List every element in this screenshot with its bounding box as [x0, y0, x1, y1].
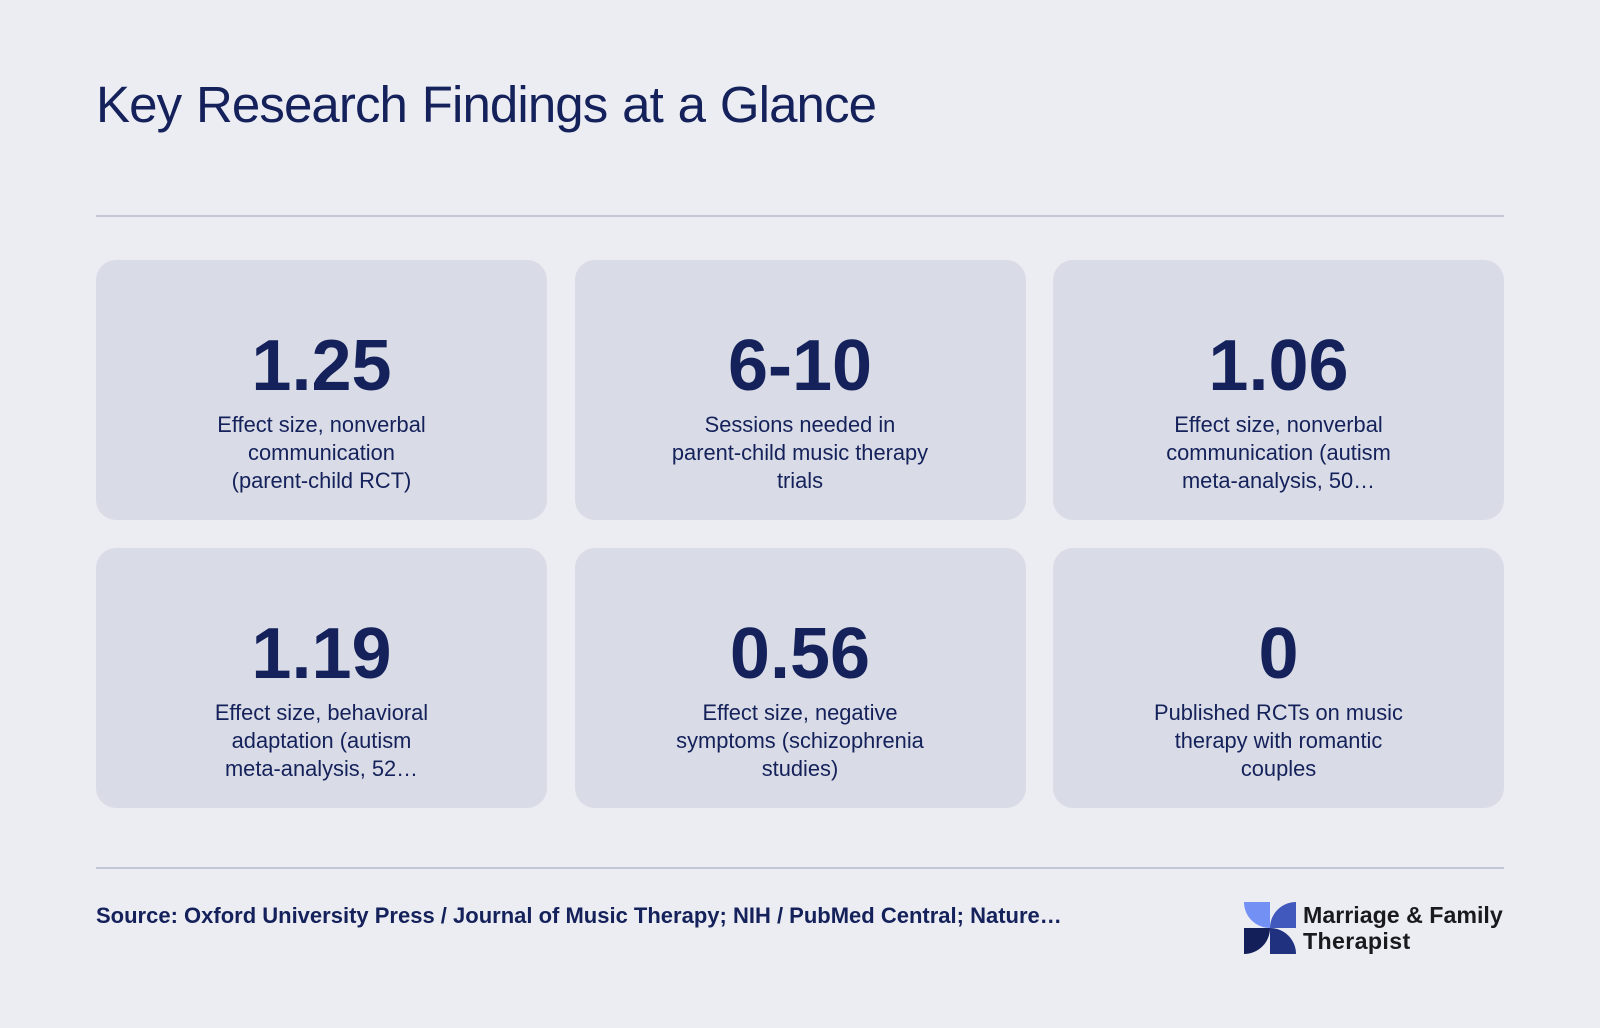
panel: stat 1.06	[1053, 260, 1504, 520]
stat label: Effect size, nonverbal	[1174, 412, 1383, 437]
stat label: communication	[248, 440, 395, 465]
stat number: 0.56	[730, 614, 870, 694]
brand name	[1303, 902, 1503, 954]
stat label: symptoms (schizophrenia	[676, 728, 924, 753]
stat label	[1166, 412, 1391, 493]
stat label: therapy with romantic	[1175, 728, 1382, 753]
stat label: communication (autism	[1166, 440, 1391, 465]
brand name: Therapist	[1303, 928, 1411, 954]
stat number: 1.25	[251, 326, 392, 406]
stat label	[215, 700, 428, 781]
stat number: 1.19	[251, 614, 392, 694]
stat label	[217, 412, 426, 493]
panel: stat 0.56	[574, 548, 1026, 808]
stat label: meta-analysis, 52…	[225, 756, 418, 781]
stat label	[1154, 700, 1403, 781]
stat label: couples	[1241, 756, 1316, 781]
panel: stat 6-10	[574, 260, 1026, 520]
stat label: meta-analysis, 50…	[1182, 468, 1375, 493]
stat label: Sessions needed in	[705, 412, 895, 437]
panel: stat 1.25	[96, 260, 547, 520]
icon: logo pinwheel	[1244, 902, 1296, 954]
stat label: trials	[777, 468, 823, 493]
stat number: 6-10	[728, 326, 872, 406]
source text: Source: Oxford University Press / Journal of Music Therapy; NIH / PubMed Central; Nature…	[96, 903, 1062, 928]
stat number: 0	[1258, 614, 1299, 694]
stat label	[672, 412, 928, 493]
stat label: adaptation (autism	[232, 728, 411, 753]
stat label: studies)	[762, 756, 838, 781]
stat label	[676, 700, 924, 781]
stat label: Effect size, behavioral	[215, 700, 428, 725]
stat label: Published RCTs on music	[1154, 700, 1403, 725]
stat number: 1.06	[1208, 326, 1349, 406]
panel: stat 0	[1053, 548, 1504, 808]
panel: stat 1.19	[96, 548, 547, 808]
stat label: parent-child music therapy	[672, 440, 928, 465]
title: Key Research Findings at a Glance	[96, 76, 876, 132]
stat label: (parent-child RCT)	[232, 468, 411, 493]
brand name: Marriage & Family	[1303, 902, 1503, 928]
stat label: Effect size, negative	[702, 700, 898, 725]
stat label: Effect size, nonverbal	[217, 412, 426, 437]
